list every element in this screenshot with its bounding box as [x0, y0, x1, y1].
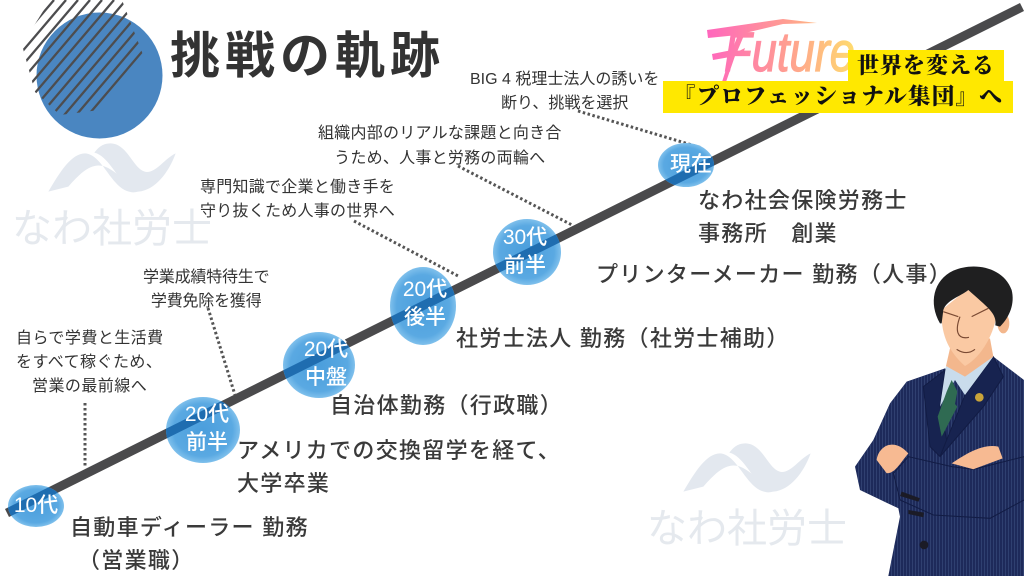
note: 30代前半	[318, 124, 562, 167]
note: 20代前半: 学費免除を獲得	[151, 293, 262, 310]
career: なわ社会保険労務士事務所: なわ社会保険労務士	[698, 188, 908, 213]
watermark text: left: なわ社労士	[12, 207, 212, 251]
career: アメリカ留学: アメリカでの交換留学を経て、	[237, 438, 561, 463]
Future script logo: Future	[724, 20, 855, 83]
node label: 30代前半	[503, 226, 547, 277]
node label: 20代前半: 20代	[185, 403, 229, 426]
node label: 30代前半: 前半	[504, 254, 546, 277]
career: 自動車ディーラー	[70, 515, 309, 573]
note: 20代前半	[143, 268, 269, 310]
node label: 30代前半: 30代	[503, 226, 547, 249]
node label: 20代前半: 前半	[186, 431, 228, 454]
node label: 20代後半: 20代	[403, 278, 447, 301]
suit body	[855, 357, 1024, 576]
face	[942, 288, 997, 366]
note: 20代後半	[200, 178, 395, 220]
note: 20代後半: 専門知識で企業と働き手を	[200, 179, 395, 196]
career: アメリカ留学: 大学卒業	[237, 471, 330, 496]
facial features	[943, 308, 988, 353]
node label: 20代中盤	[304, 338, 348, 389]
note: 現在: BIG 4 税理士法人の誘いを	[470, 71, 659, 88]
lapels	[923, 357, 1003, 457]
career: なわ社会保険労務士事務所	[698, 188, 908, 246]
node label: 20代中盤: 中盤	[305, 366, 347, 389]
career: プリンターメーカー: プリンターメーカー 勤務（人事）	[596, 262, 952, 287]
yellow banner: line 1	[848, 50, 1004, 82]
note: 30代前半: うため、人事と労務の両輪へ	[334, 150, 545, 167]
note: 10代	[16, 329, 164, 395]
note: 10代: 自らで学費と生活費	[16, 330, 164, 347]
note: 10代: 営業の最前線へ	[32, 378, 147, 395]
node label: 現在: 現在	[670, 153, 712, 176]
watermark text: right: なわ社労士	[647, 507, 847, 551]
note: 20代前半: 学業成績特待生で	[143, 269, 269, 286]
node label: 20代前半	[185, 403, 229, 454]
node label: 20代後半	[403, 278, 447, 329]
node label: 20代後半: 後半	[404, 306, 446, 329]
ear	[997, 313, 1009, 333]
title: 挑戦の軌跡	[170, 28, 445, 84]
yellow banner: line 2: 『プロフェッショナル集団』へ	[673, 84, 1003, 109]
folded arm	[893, 457, 1024, 518]
career: 自動車ディーラー: 自動車ディーラー 勤務	[70, 515, 309, 540]
career: 自治体勤務: 自治体勤務（行政職）	[330, 393, 563, 418]
buttons	[900, 492, 924, 517]
career: 社労士法人: 社労士法人 勤務（社労士補助）	[456, 326, 790, 351]
hands	[877, 445, 908, 473]
node label: 20代中盤: 20代	[304, 338, 348, 361]
note: 20代後半: 守り抜くため人事の世界へ	[200, 203, 395, 220]
note: 10代: をすべて稼ぐため、	[16, 354, 162, 371]
career: 自動車ディーラー: （営業職）	[78, 548, 195, 573]
yellow banner: line 1: 世界を変える	[857, 53, 995, 78]
node label: 10代: 10代	[14, 494, 58, 517]
career: アメリカ留学	[237, 438, 561, 496]
neck	[946, 338, 993, 377]
note: 30代前半: 組織内部のリアルな課題と向き合	[318, 125, 562, 142]
shirt	[940, 357, 993, 407]
tie	[938, 380, 957, 437]
note: 現在	[470, 70, 659, 112]
career: なわ社会保険労務士事務所: 事務所 創業	[698, 221, 838, 246]
title circle icon with stripes	[23, 0, 162, 138]
hair	[934, 266, 1013, 327]
timeline nodes	[8, 143, 714, 527]
lapel badge	[975, 393, 984, 402]
note: 現在: 断り、挑戦を選択	[501, 95, 628, 112]
